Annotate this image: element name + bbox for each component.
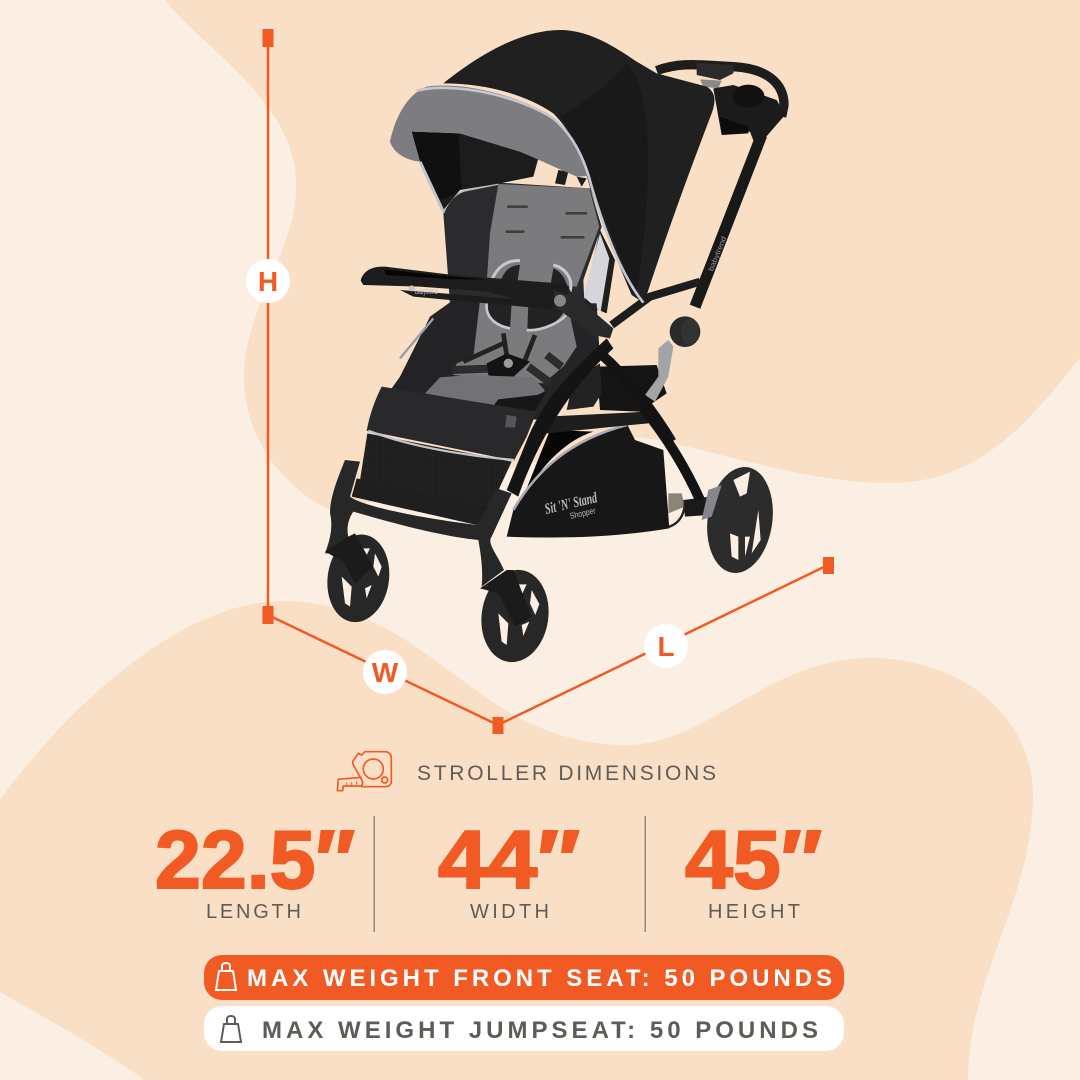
icon: tape measure [337, 752, 391, 791]
metric: height: 45″ [685, 813, 822, 906]
stroller: tray and canopy [361, 30, 714, 338]
stroller: handle, cup holder and column [443, 63, 785, 353]
handle column [695, 135, 762, 307]
seat back [443, 183, 602, 353]
under pocket panel [352, 478, 488, 525]
tray [361, 267, 571, 308]
brand on column: babytrend [706, 235, 728, 272]
seat cushion [425, 375, 545, 406]
height line [267, 38, 269, 615]
tray arm [553, 290, 613, 338]
buckle [487, 353, 530, 380]
label L: L [657, 631, 675, 662]
canopy light trim [420, 162, 443, 212]
harness slots [507, 207, 586, 237]
grey bracket [645, 340, 673, 402]
right front wheel [476, 565, 554, 667]
label H: H [258, 266, 278, 297]
basket [507, 423, 669, 537]
divider [644, 816, 646, 932]
left wheel [322, 530, 395, 626]
gap straps [555, 170, 587, 187]
seat base [383, 300, 600, 420]
width line [268, 615, 498, 725]
mesh pocket [360, 433, 512, 508]
background blob: bottom [0, 601, 1033, 1080]
pill: front seat weight [204, 955, 844, 1000]
length line [498, 565, 828, 725]
canopy grey underside [390, 86, 589, 177]
icon: weight [216, 963, 236, 990]
pill: front seat weight: MAX WEIGHT FRONT SEAT: 50 POUNDS [247, 965, 832, 992]
divider [374, 816, 375, 932]
heading: STROLLER DIMENSIONS [417, 762, 716, 785]
silver edge [400, 318, 433, 358]
shoulder loops [500, 265, 567, 292]
stroller: rear leg, shelf and knob [547, 316, 700, 442]
hinge knob [670, 316, 700, 347]
pill: jumpseat weight [204, 1006, 844, 1051]
stroller: seat lower area [383, 300, 600, 420]
handle [657, 65, 784, 117]
side bag [567, 363, 602, 410]
dark inner loops [487, 303, 565, 330]
canopy black top [443, 30, 714, 303]
metric: length: LENGTH [206, 901, 301, 923]
side arm [612, 282, 700, 325]
front bag [367, 387, 537, 461]
main frame tube [507, 338, 613, 497]
shelf behind seat [597, 365, 667, 412]
dimension lines [262, 29, 834, 734]
background blob: top [165, 0, 1080, 511]
tray brand: babytrend [415, 287, 438, 296]
stroller photo illustration [322, 30, 785, 667]
metric: height: HEIGHT [708, 901, 800, 923]
metric: width: 44″ [438, 813, 580, 906]
metric: length: 22.5″ [155, 813, 355, 906]
stroller: front wheels, bag and frame [322, 338, 613, 667]
caster forks [325, 533, 373, 583]
label L [644, 624, 688, 668]
center seat [453, 300, 577, 383]
metric: width: WIDTH [470, 901, 549, 923]
seat side right [583, 230, 615, 313]
harness straps [463, 333, 535, 362]
rear leg [604, 357, 672, 442]
canopy inner [412, 132, 538, 210]
front frame [325, 460, 512, 587]
rear wheel [701, 463, 779, 577]
label W: W [372, 657, 399, 688]
stroller: rear wheel, rear leg and basket [507, 423, 779, 577]
cup holder [713, 85, 785, 145]
stroller: rear wheel, rear leg and basket: Shopper [569, 505, 597, 521]
icon: weight [221, 1016, 241, 1042]
label W [363, 650, 407, 694]
basket label: Sit 'N' Stand [543, 489, 599, 518]
rear axle bracket [668, 493, 685, 513]
pill: jumpseat weight: MAX WEIGHT JUMPSEAT: 50 POUNDS [262, 1017, 818, 1044]
label H [246, 259, 290, 303]
